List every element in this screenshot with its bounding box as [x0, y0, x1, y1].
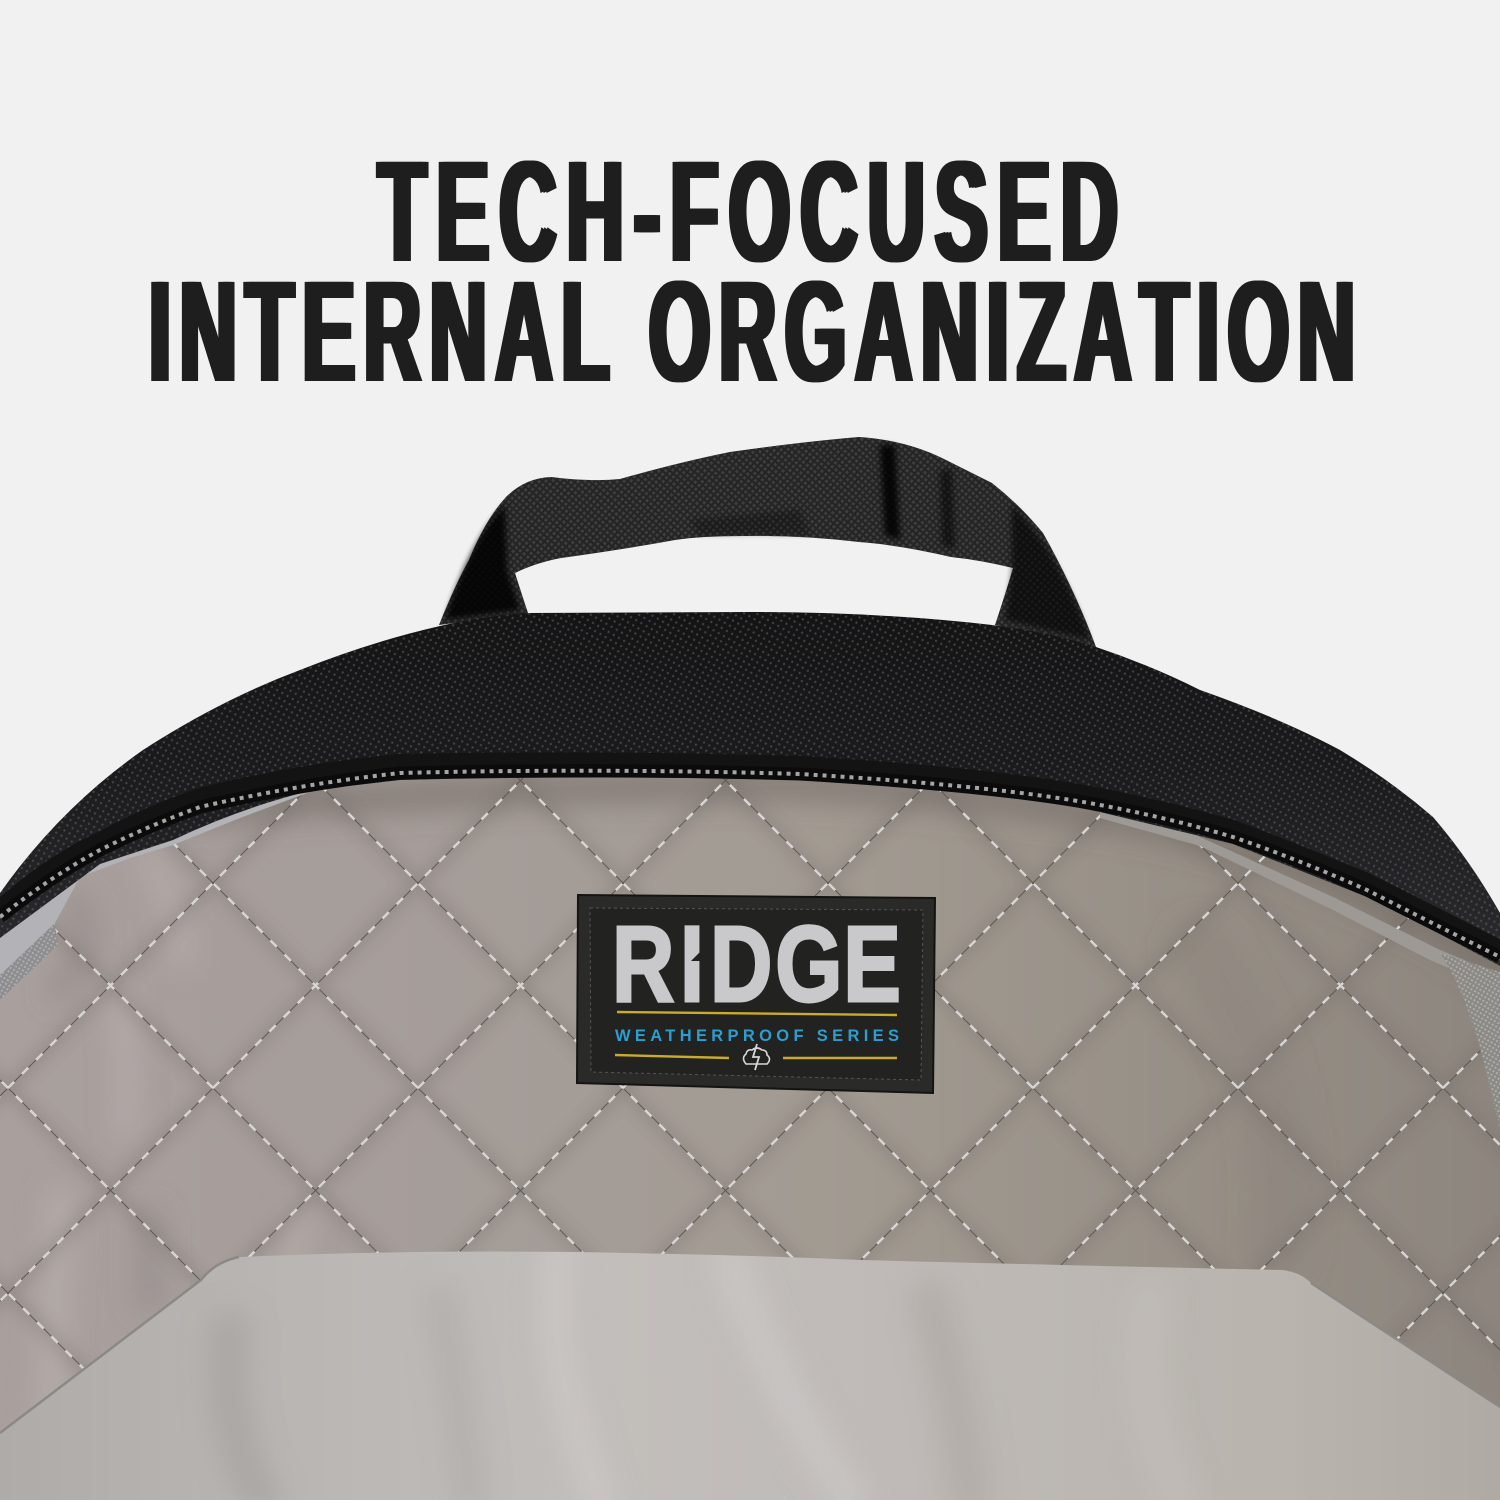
yellow rule lines — [615, 1012, 897, 1058]
quilted lining — [0, 778, 1500, 1432]
title: TECH-FOCUSED — [378, 131, 1128, 292]
title — [149, 131, 1364, 412]
side webbing right — [1440, 953, 1500, 1127]
zipper teeth — [0, 771, 1500, 957]
zipper tape — [0, 760, 1500, 948]
backpack top fabric — [0, 612, 1500, 966]
interior pocket panel — [0, 1250, 1500, 1500]
brand label: Ridge Weatherproof Series — [577, 895, 935, 1093]
label subtitle: WEATHERPROOF SERIES — [615, 1027, 899, 1045]
backpack handle — [439, 437, 1096, 647]
title: INTERNAL ORGANIZATION — [149, 251, 1364, 412]
main fabric lining strips and zipper edge — [0, 785, 1500, 1127]
pocket fabric folds — [211, 1289, 982, 1500]
stitching — [0, 778, 1500, 1369]
label wordmark: RIDGE — [612, 903, 901, 1024]
quilt tuft shading — [0, 778, 1450, 1372]
label wordmark notch — [691, 951, 701, 961]
icon: cloud with lightning bolt — [744, 1044, 770, 1070]
velvet folds — [50, 785, 1500, 1420]
